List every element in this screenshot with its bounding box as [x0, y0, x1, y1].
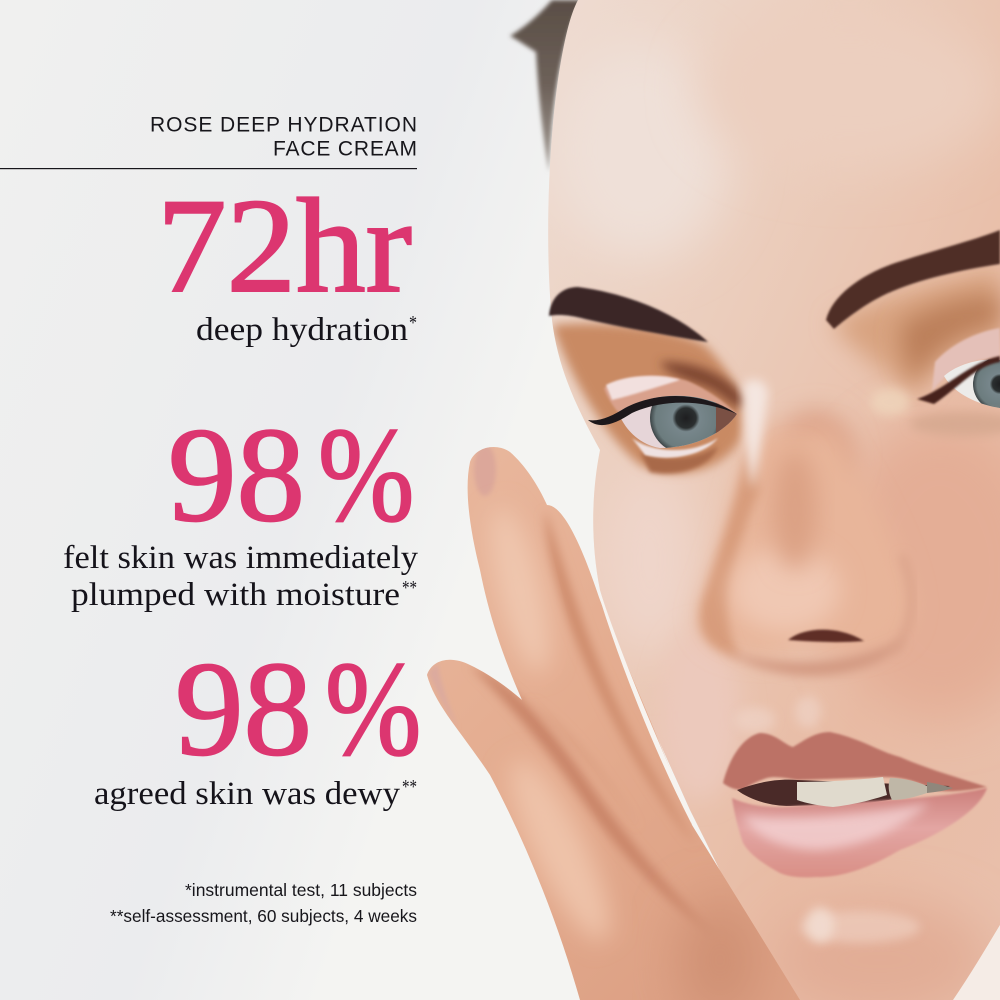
- stat: 98% dewy skin: agreed skin was dewy: [94, 776, 401, 812]
- product title: FACE CREAM: [273, 138, 417, 160]
- teeth: [797, 777, 953, 807]
- left eye socket: [552, 323, 745, 474]
- footnotes: [110, 880, 417, 926]
- highlight beside nose bridge: [743, 380, 768, 490]
- right eye socket: [832, 268, 1000, 398]
- stat: 98% immediately plumped: plumped with moisture: [71, 577, 400, 613]
- stat: 98% dewy skin: 98: [175, 635, 312, 784]
- footnotes: **self-assessment, 60 subjects, 4 weeks: [110, 906, 417, 926]
- footnotes: *instrumental test, 11 subjects: [185, 880, 417, 900]
- stat: 98% immediately plumped: [63, 401, 419, 613]
- hair: [510, 0, 582, 172]
- panel: product claims: [0, 114, 421, 926]
- background corner at lower right: [953, 925, 1000, 1000]
- product title: ROSE DEEP HYDRATION: [150, 114, 417, 136]
- product title: [150, 114, 417, 160]
- stat: 98% dewy skin: %: [325, 635, 421, 784]
- stat: 72hr deep hydration: deep hydration: [196, 312, 408, 348]
- face skin: [548, 0, 1000, 1000]
- stat: 98% immediately plumped: %: [318, 401, 414, 550]
- left eyebrow: [549, 287, 708, 342]
- face shading: [550, 10, 1000, 1000]
- stat: 72hr deep hydration: *: [409, 312, 417, 334]
- left eye: [588, 376, 740, 458]
- nose: [700, 430, 912, 676]
- gap between hand and face: [600, 595, 692, 822]
- title rule: [0, 168, 417, 169]
- stat: 98% immediately plumped: felt skin was immediately: [63, 540, 419, 576]
- stat: 72hr deep hydration: 72hr: [157, 171, 412, 321]
- stat: 98% immediately plumped: 98: [168, 401, 305, 550]
- photo: woman's face with hand: [427, 0, 1000, 1000]
- right eyebrow: [826, 230, 1000, 329]
- hand: [427, 444, 800, 1000]
- hand base: [427, 447, 800, 1000]
- stat: 98% dewy skin: **: [402, 776, 417, 798]
- right eye: [870, 328, 1000, 436]
- lips: [723, 732, 987, 877]
- stat: 98% immediately plumped: **: [402, 577, 417, 599]
- hand shading: [428, 444, 760, 1000]
- stat: 98% dewy skin: [94, 635, 421, 812]
